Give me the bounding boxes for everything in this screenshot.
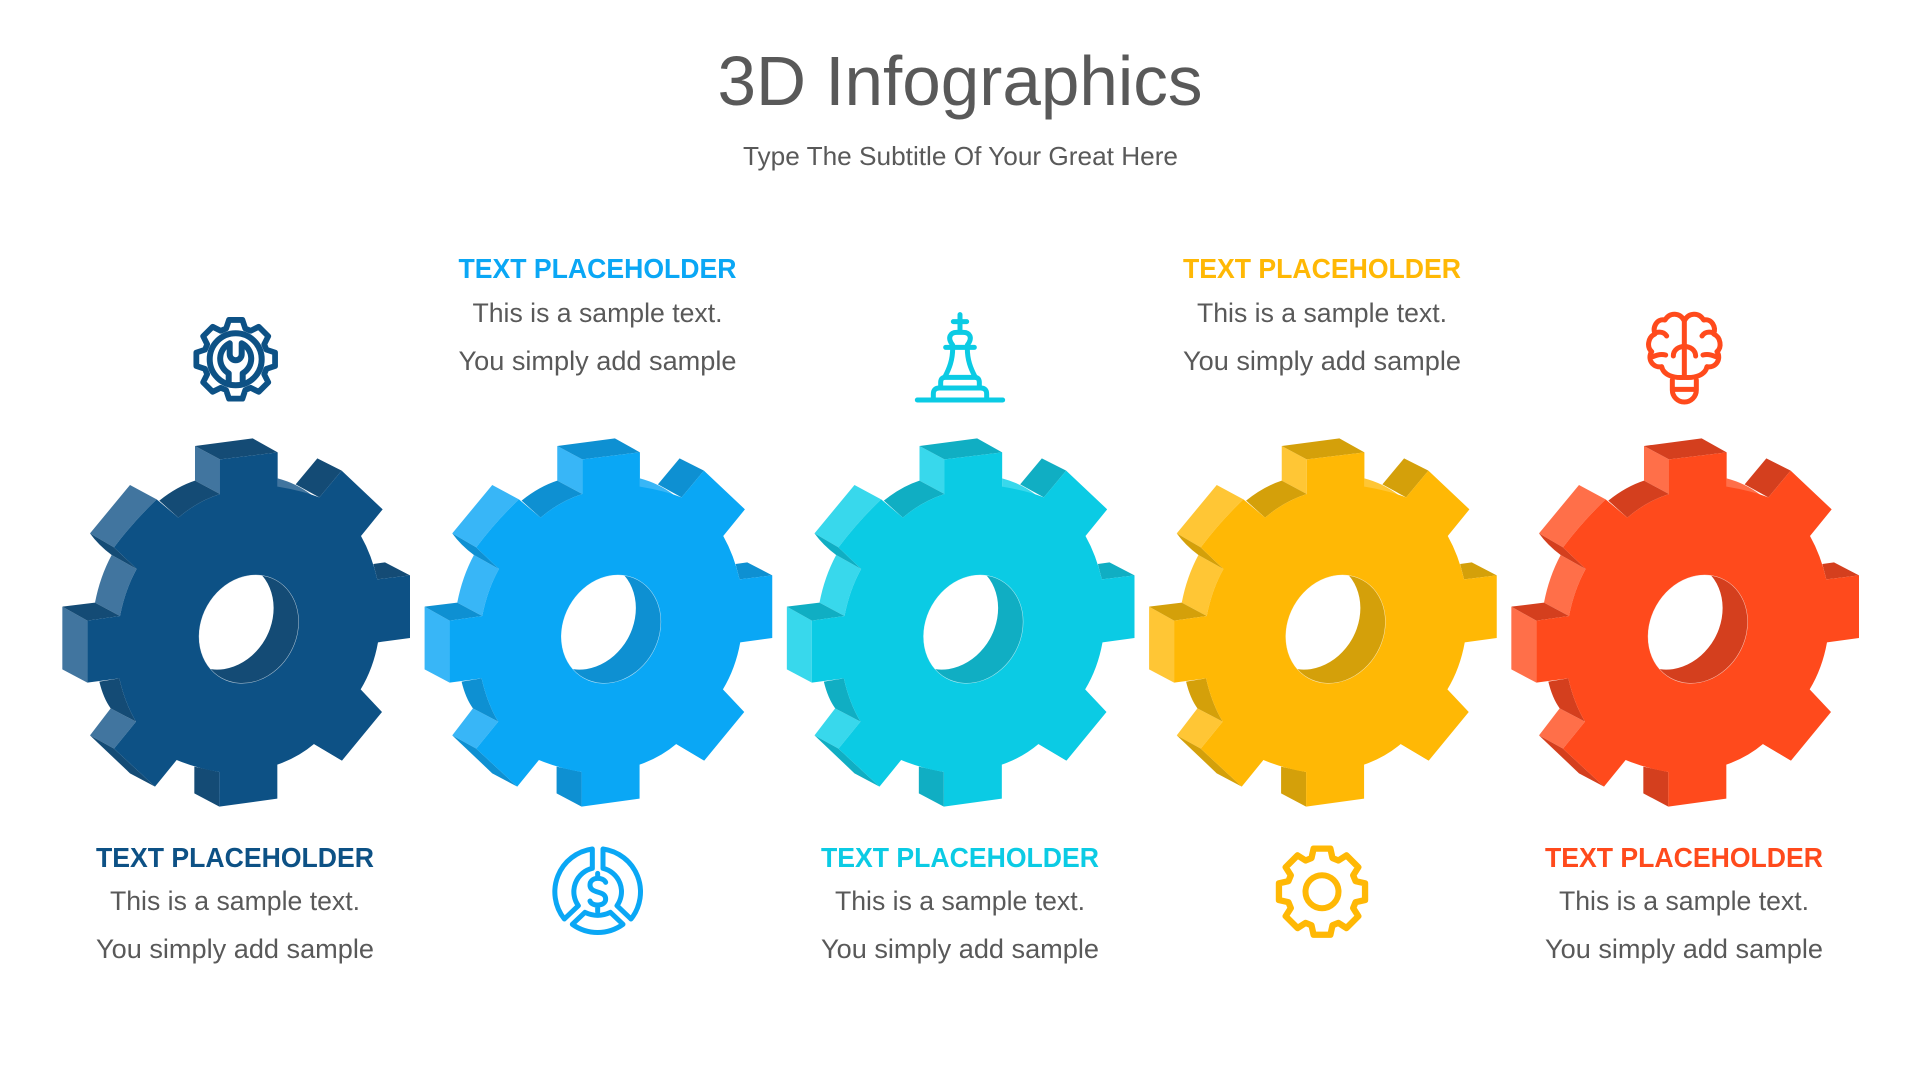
text block: navy: This is a sample text. — [110, 886, 360, 916]
gear: navy — [62, 438, 410, 807]
text block: blue: You simply add sample — [458, 346, 736, 376]
text block: navy — [96, 842, 374, 964]
text block: yellow: TEXT PLACEHOLDER — [1183, 253, 1461, 284]
icon: wrench in gear — [196, 320, 275, 399]
text block: blue: TEXT PLACEHOLDER — [458, 253, 736, 284]
text block: cyan — [821, 842, 1099, 964]
text block: cyan: This is a sample text. — [835, 886, 1085, 916]
text block: yellow — [1183, 253, 1461, 376]
text block: blue: This is a sample text. — [472, 298, 722, 328]
gear: yellow — [1149, 438, 1497, 807]
text block: blue — [458, 253, 736, 376]
text block: yellow: This is a sample text. — [1197, 298, 1447, 328]
text block: yellow: You simply add sample — [1183, 346, 1461, 376]
text block: navy: You simply add sample — [96, 934, 374, 964]
text block: navy: TEXT PLACEHOLDER — [96, 842, 374, 873]
text block: orange — [1545, 842, 1823, 964]
text block: orange: This is a sample text. — [1559, 886, 1809, 916]
gear: cyan — [787, 438, 1134, 807]
title: 3D Infographics — [718, 42, 1202, 120]
gear: blue — [425, 438, 772, 807]
text block: cyan: TEXT PLACEHOLDER — [821, 842, 1099, 873]
icon: gear outline — [1279, 849, 1365, 935]
icon: brain — [1649, 314, 1720, 402]
icon: chess king — [917, 315, 1003, 400]
icon: dollar segments — [555, 849, 640, 933]
text block: orange: You simply add sample — [1545, 934, 1823, 964]
gear: orange — [1511, 438, 1859, 807]
subtitle: Type The Subtitle Of Your Great Here — [743, 141, 1178, 171]
text block: cyan: You simply add sample — [821, 934, 1099, 964]
text block: orange: TEXT PLACEHOLDER — [1545, 842, 1823, 873]
